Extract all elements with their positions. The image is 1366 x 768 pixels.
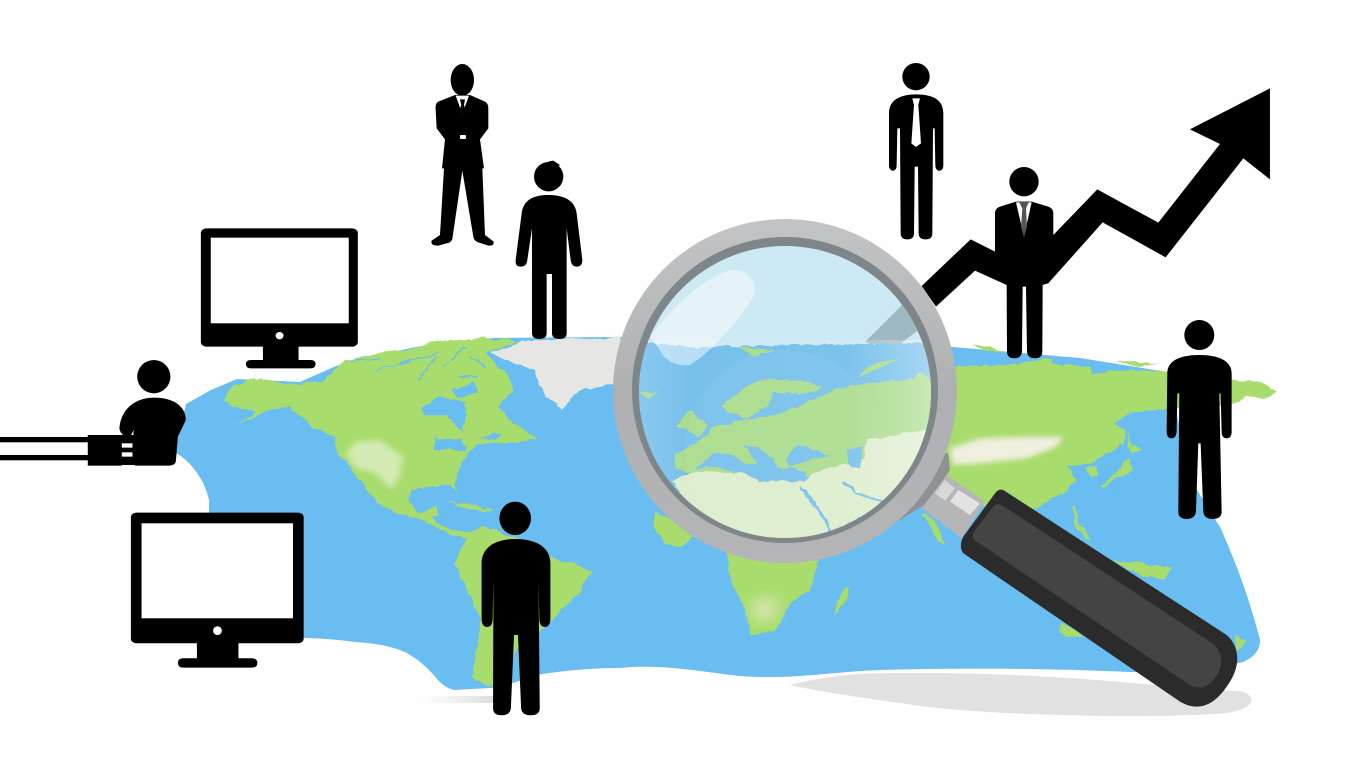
glass highlight — [650, 270, 755, 365]
magnified black and caspian seas — [785, 445, 863, 467]
magnified british isles and arctic islands — [640, 347, 932, 437]
continents: Eurasia and Oceania — [867, 345, 1277, 650]
magnified sea — [639, 342, 930, 530]
southern africa — [726, 552, 820, 636]
cable connector — [0, 435, 134, 466]
person: standing above greenland — [516, 161, 582, 339]
arctic channels — [348, 347, 486, 380]
new guinea — [1112, 560, 1173, 578]
caribbean islands — [447, 501, 494, 512]
continents with rough coastlines — [223, 337, 1277, 687]
indonesia — [1072, 505, 1092, 542]
illustration: global analysis scene — [0, 63, 1277, 716]
north and south america — [223, 338, 592, 687]
person: arms folded, in suit — [431, 64, 494, 246]
lens rim — [613, 219, 957, 563]
madagascar — [834, 587, 850, 615]
magnified map — [633, 343, 940, 550]
asia — [867, 358, 1277, 517]
arrow seen through lens — [865, 305, 925, 348]
australia fragments — [1060, 623, 1247, 650]
arctic islands — [972, 345, 1157, 366]
person standing on south america — [482, 502, 550, 715]
hudson bay and great lakes — [421, 382, 502, 453]
world map — [176, 337, 1277, 690]
handle grip — [961, 490, 1237, 707]
person: in suit on the growth line — [995, 167, 1053, 358]
person with plugged-in cables — [0, 360, 186, 466]
monitor: lower — [131, 513, 304, 668]
greenland — [490, 337, 620, 408]
person: with white tie — [889, 63, 943, 239]
korea, japan and sakhalin — [1087, 430, 1143, 487]
monitor: upper — [201, 228, 358, 368]
ocean — [176, 337, 1260, 690]
continents: Americas and Greenland — [223, 337, 620, 687]
magnified mediterranean — [695, 445, 807, 481]
magnified scandinavia — [720, 378, 823, 417]
magnifying glass — [613, 219, 1237, 707]
arrow: rising growth line — [922, 88, 1270, 307]
terrain relief — [346, 437, 1063, 622]
person: standing on east asia — [1167, 320, 1232, 519]
glass sheen — [639, 340, 931, 531]
central asian plateau — [950, 437, 1063, 465]
western mountain relief — [346, 440, 403, 490]
west africa — [653, 513, 700, 548]
magnified red sea and gulf — [800, 482, 883, 531]
lens glass with magnified europe — [639, 246, 931, 538]
southern africa relief — [752, 598, 780, 622]
continents: Africa — [653, 513, 850, 636]
magnified eurasia — [675, 378, 933, 477]
arabia fragment — [920, 513, 947, 546]
ground shadows — [420, 673, 1251, 716]
magnified sahara and arabia — [672, 428, 933, 540]
handle connector — [880, 447, 985, 538]
